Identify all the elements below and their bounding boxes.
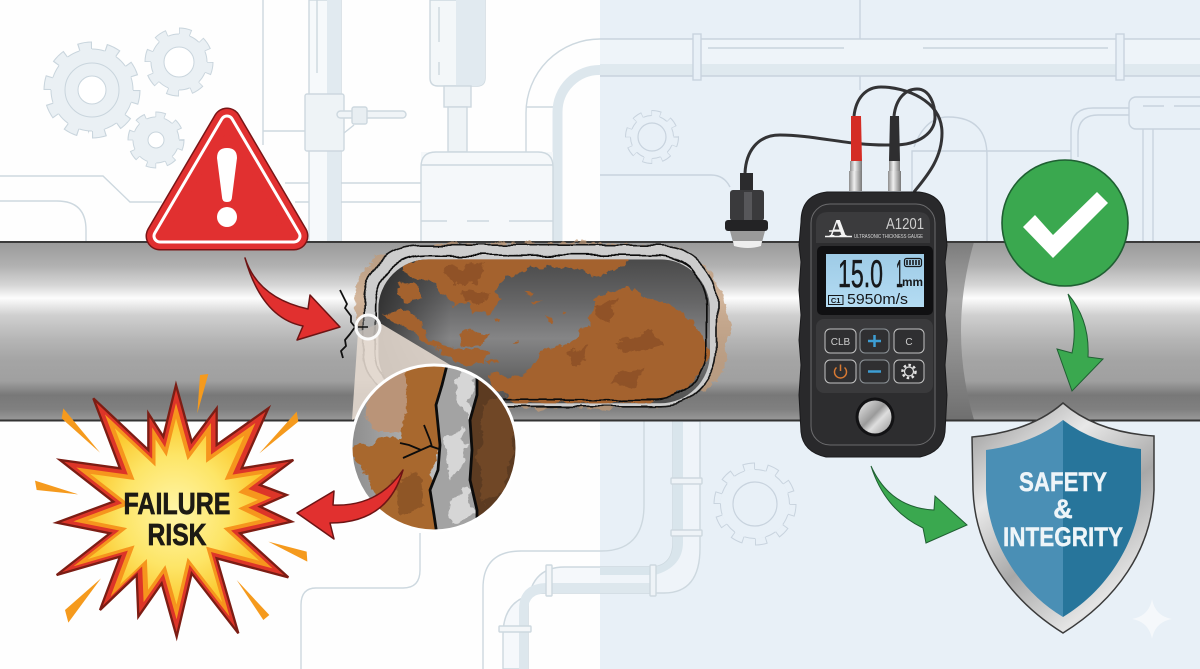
model number: A1201: [886, 216, 924, 233]
burst outer red layer: [57, 385, 293, 637]
check mark: [1023, 192, 1108, 258]
magnifier cone: [352, 323, 452, 420]
shield label: [1003, 467, 1123, 552]
burst yellow core: [88, 418, 263, 605]
black crack lines: [430, 365, 447, 535]
device inner contour: [811, 204, 935, 445]
settings key: [902, 365, 916, 378]
background gear: right lower outline: [717, 466, 793, 542]
burst sparks: [35, 374, 307, 623]
ultrasonic probe: [725, 173, 768, 248]
gear large: [48, 46, 136, 134]
green arrow: check to shield: [1057, 294, 1103, 391]
background gears: left cluster: [48, 31, 210, 166]
corroded pipe wall section: [354, 243, 731, 409]
warning triangle icon: [160, 122, 294, 236]
rust patches: [384, 249, 709, 404]
rust stain around rim: [354, 243, 731, 409]
green check circle: [1002, 160, 1128, 286]
green arrow: gauge to shield: [871, 466, 967, 543]
minus key: [868, 370, 881, 373]
failure risk label: FAILURE: [124, 486, 230, 521]
C label: C: [905, 337, 913, 348]
burst orange layer: [73, 403, 277, 619]
pipe surface crack: [340, 290, 355, 358]
red connector: [849, 116, 862, 191]
gear medium: [148, 31, 210, 93]
logo: A: [829, 216, 847, 242]
device connectors: [849, 116, 901, 191]
background pipework: right: [600, 0, 1200, 241]
shield label: &: [1053, 494, 1073, 524]
background: right blue half: [600, 0, 1200, 669]
shield silver frame: [972, 403, 1154, 633]
magnified crack detail: [352, 364, 516, 530]
keypad buttons: [825, 329, 924, 383]
silver rim: [364, 246, 717, 406]
CLB label: CLB: [831, 337, 851, 348]
silver dial: [856, 398, 894, 436]
rim inner edge: [375, 256, 706, 400]
background: left white half: [0, 0, 600, 669]
rust layer: [352, 366, 445, 530]
screen bezel: [817, 246, 933, 315]
sparkle mark: [1132, 599, 1172, 639]
power key: [834, 364, 846, 378]
shield left face: [986, 420, 1063, 617]
unit: mm: [902, 277, 923, 289]
exclamation mark: [217, 148, 237, 202]
failure risk label: RISK: [148, 517, 207, 552]
magnifier small circle: [356, 315, 380, 339]
probe cable and leads: [745, 87, 942, 192]
background gear: right upper outline: [628, 113, 676, 161]
failure risk burst: [35, 374, 307, 637]
product name: ULTRASONIC THICKNESS GAUGE: [854, 234, 923, 240]
gear small: [130, 114, 182, 166]
ultrasonic thickness gauge device: [799, 192, 947, 457]
LCD screen: [826, 253, 924, 308]
red arrow: crack to failure: [297, 470, 403, 539]
shield right face: [1063, 420, 1141, 617]
silver bare metal band: [432, 368, 476, 530]
keypad panel: [816, 319, 933, 393]
black connector: [888, 116, 901, 191]
logo: [825, 216, 852, 242]
LCD screen: 1: [896, 253, 903, 296]
red arrow: warning to crack: [245, 258, 340, 340]
thickness reading: 15.0: [838, 253, 883, 296]
velocity reading: 5950m/s: [847, 292, 908, 308]
hole interior: [378, 249, 710, 404]
darker rust mottling: [444, 264, 662, 387]
main steel pipe: [0, 241, 1200, 422]
battery indicator: [904, 258, 922, 266]
failure risk label: [124, 486, 230, 552]
safety shield: [972, 403, 1154, 633]
C1 tag: C1: [831, 296, 840, 305]
shield label: SAFETY: [1019, 467, 1107, 497]
dark corroded side: [471, 380, 516, 516]
plus key: [868, 335, 881, 347]
background pipework: lower: [301, 421, 702, 669]
background pipework: left: [0, 0, 600, 242]
device header panel: [816, 212, 930, 243]
device body: [799, 192, 947, 457]
shield label: INTEGRITY: [1003, 522, 1123, 552]
